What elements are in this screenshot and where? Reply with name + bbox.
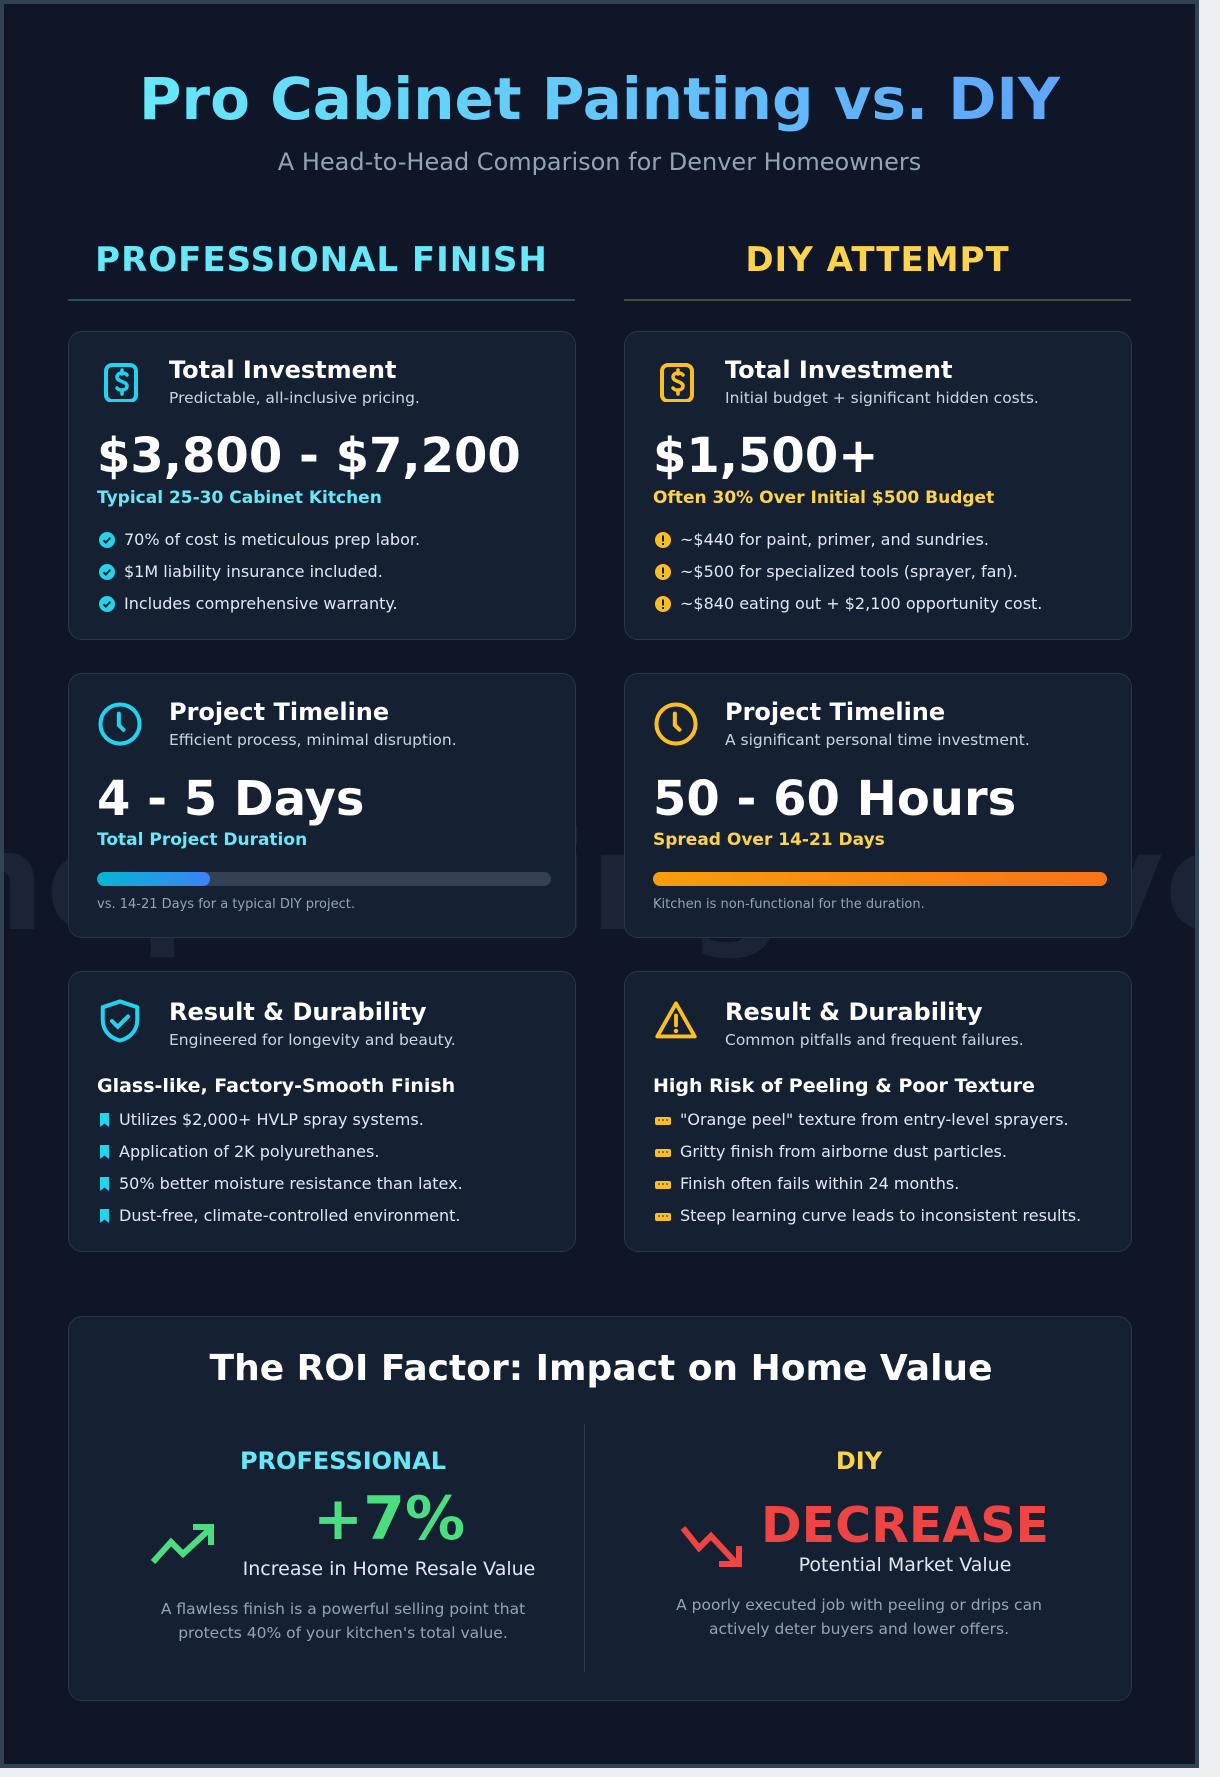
pro ROI: +7% <box>313 1484 465 1554</box>
ROI title: The ROI Factor: Impact on Home Value <box>210 1348 992 1389</box>
icon: clock <box>98 702 142 746</box>
icon: dollar <box>104 363 138 402</box>
panel: pro timeline: Efficient process, minimal disruption. <box>169 731 457 749</box>
panel: ROI <box>68 1316 1132 1701</box>
diy ROI: DECREASE <box>761 1497 1049 1554</box>
panel: diy investment: Initial budget + significant hidden costs. <box>725 389 1039 407</box>
icon: dollar <box>660 363 694 402</box>
panel: diy timeline: 50 - 60 Hours <box>653 771 1016 827</box>
panel: diy timeline: Kitchen is non-functional for the duration. <box>653 897 925 912</box>
panel: diy result <box>624 971 1132 1252</box>
panel: diy investment <box>624 331 1132 640</box>
subtitle: A Head-to-Head Comparison for Denver Homeowners <box>278 148 921 176</box>
panel: pro result: Engineered for longevity and beauty. <box>169 1031 456 1049</box>
diy ROI: DIY <box>836 1447 882 1475</box>
panel: pro timeline: vs. 14-21 Days for a typical DIY project. <box>97 897 355 912</box>
divider <box>584 1424 585 1672</box>
panel: diy timeline <box>624 673 1132 938</box>
icon: trend down <box>680 1526 742 1567</box>
title: Pro Cabinet Painting vs. DIY <box>139 65 1060 133</box>
panel: pro result: Application of 2K polyurethanes. <box>119 1142 379 1161</box>
panel: diy result: Common pitfalls and frequent failures. <box>725 1031 1024 1049</box>
panel: pro result: Result & Durability <box>169 998 426 1026</box>
diy ROI: Potential Market Value <box>799 1554 1011 1576</box>
diy ROI: actively deter buyers and lower offers. <box>709 1620 1009 1638</box>
bullets: "Orange peel" texture from entry-level sprayers. <box>680 1110 1069 1129</box>
panel: diy investment: ~$840 eating out + $2,100 opportunity cost. <box>680 594 1042 613</box>
panel: diy result: Steep learning curve leads to inconsistent results. <box>680 1206 1081 1225</box>
panel: pro result <box>68 971 576 1252</box>
panel: pro investment: Total Investment <box>169 356 396 384</box>
pro ROI: A flawless finish is a powerful selling point that <box>161 1600 525 1618</box>
bullets: Utilizes $2,000+ HVLP spray systems. <box>119 1110 424 1129</box>
pro ROI <box>150 1447 535 1642</box>
progress bar <box>97 872 551 886</box>
panel: diy result: High Risk of Peeling & Poor Texture <box>653 1075 1035 1097</box>
icon: clock <box>654 702 698 746</box>
pro ROI: Increase in Home Resale Value <box>243 1558 535 1580</box>
icon: trend up <box>150 1524 214 1564</box>
value: $1,500+ <box>653 428 878 484</box>
value: $3,800 - $7,200 <box>97 428 521 484</box>
panel: pro timeline: Total Project Duration <box>97 830 307 850</box>
diy ROI: A poorly executed job with peeling or drips can <box>676 1596 1042 1614</box>
panel: diy result: Gritty finish from airborne dust particles. <box>680 1142 1007 1161</box>
panel: pro investment: $1M liability insurance included. <box>124 562 383 581</box>
icon: shield <box>100 999 140 1043</box>
panel: pro investment: Predictable, all-inclusive pricing. <box>169 389 420 407</box>
panel: pro timeline: Project Timeline <box>169 698 389 726</box>
panel: pro timeline: 4 - 5 Days <box>97 771 364 827</box>
panel: diy investment: ~$500 for specialized tools (sprayer, fan). <box>680 562 1018 581</box>
panel: pro result: 50% better moisture resistance than latex. <box>119 1174 463 1193</box>
panel: pro result: Dust-free, climate-controlled environment. <box>119 1206 461 1225</box>
progress bar <box>653 872 1107 886</box>
panel: pro result: Glass-like, Factory-Smooth Finish <box>97 1075 455 1097</box>
panel: diy timeline: Spread Over 14-21 Days <box>653 830 885 850</box>
bullets: ~$440 for paint, primer, and sundries. <box>680 530 989 549</box>
icon: warning <box>655 1001 697 1038</box>
panel: diy timeline: A significant personal time investment. <box>725 731 1030 749</box>
heading: professional: PROFESSIONAL FINISH <box>95 240 548 280</box>
panel: pro investment: Typical 25-30 Cabinet Kitchen <box>97 488 382 508</box>
panel: diy timeline: Project Timeline <box>725 698 945 726</box>
pro ROI: protects 40% of your kitchen's total value. <box>178 1624 508 1642</box>
panel: pro timeline <box>68 673 576 938</box>
panel: diy investment: Often 30% Over Initial $500 Budget <box>653 488 994 508</box>
diy ROI <box>676 1447 1049 1638</box>
pro ROI: PROFESSIONAL <box>240 1447 446 1475</box>
heading: diy: DIY ATTEMPT <box>745 240 1010 280</box>
panel: pro investment <box>68 331 576 640</box>
panel: pro investment: Includes comprehensive warranty. <box>124 594 398 613</box>
panel: diy investment: Total Investment <box>725 356 952 384</box>
panel: diy result: Finish often fails within 24 months. <box>680 1174 959 1193</box>
panel: diy result: Result & Durability <box>725 998 982 1026</box>
bullets: 70% of cost is meticulous prep labor. <box>124 530 420 549</box>
